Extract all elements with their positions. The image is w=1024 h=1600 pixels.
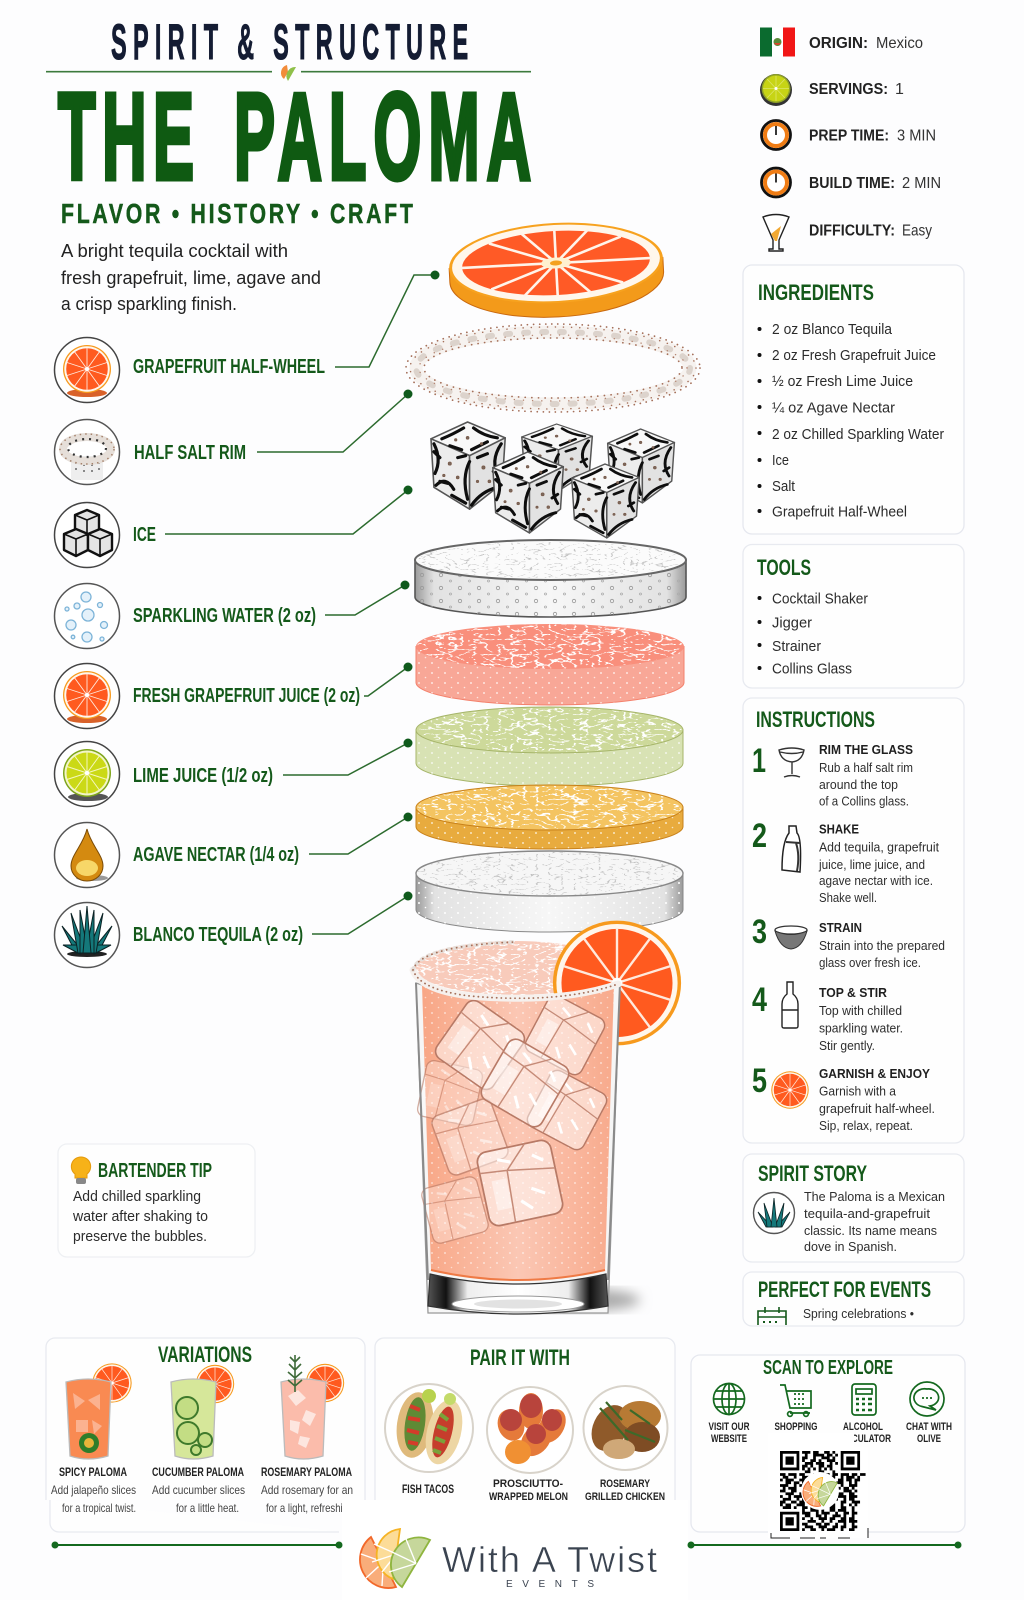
fact: prep time: 3 MIN	[897, 128, 936, 144]
step 2	[752, 817, 939, 905]
tool bullets	[758, 596, 762, 670]
label: sparkling water: SPARKLING WATER (2 oz)	[133, 605, 316, 627]
title: Spirit & Structure: SPIRIT & STRUCTURE	[111, 15, 468, 71]
step 1: of a Collins glass.	[819, 794, 909, 808]
heading: bartender tip: BARTENDER TIP	[98, 1160, 212, 1182]
step 1: 1	[752, 742, 766, 780]
ingredient list with leaders	[54, 270, 440, 968]
heading: pair it with: PAIR IT WITH	[470, 1345, 570, 1370]
pairing: prosciutto-wrapped melon	[487, 1387, 573, 1503]
layer: ice cubes	[431, 422, 674, 538]
tools list: Collins Glass	[772, 660, 852, 678]
pairing: rosemary grilled chicken: GRILLED CHICKEN	[585, 1491, 665, 1503]
text: spirit story: The Paloma is a Mexican	[804, 1189, 945, 1204]
fact: difficulty: Easy	[902, 222, 932, 240]
step 5: 5	[752, 1062, 767, 1100]
pairing: prosciutto-wrapped melon: WRAPPED MELON	[489, 1491, 568, 1503]
icon: build clock	[762, 168, 790, 197]
step 3: 3	[752, 913, 767, 951]
pairing: rosemary grilled chicken: ROSEMARY	[600, 1478, 651, 1490]
fact: difficulty: DIFFICULTY:	[809, 222, 895, 240]
ingredient list: ¼ oz Agave Nectar	[772, 400, 895, 416]
variation: spicy paloma: for a tropical twist.	[62, 1501, 136, 1515]
step 5: GARNISH & ENJOY	[819, 1066, 930, 1081]
step 5	[752, 1062, 935, 1133]
leader: ice	[165, 486, 412, 534]
heading: instructions: INSTRUCTIONS	[756, 707, 875, 732]
layer: grapefruit slice	[447, 217, 666, 323]
intro text	[61, 241, 321, 314]
label: half salt rim: HALF SALT RIM	[134, 442, 246, 464]
pairing: fish tacos	[385, 1384, 473, 1496]
variation: rosemary paloma	[261, 1355, 353, 1515]
ingredient list: 2 oz Chilled Sparkling Water	[772, 426, 944, 443]
step 3: Strain into the prepared	[819, 938, 945, 953]
step 4: 4	[752, 981, 767, 1019]
main title: The Paloma: PALOMA	[234, 68, 531, 206]
step 2: Shake well.	[819, 890, 877, 905]
bottom rule right	[688, 1542, 962, 1548]
intro text: A bright tequila cocktail with	[61, 241, 288, 261]
icon: ice	[54, 502, 120, 568]
text: bartender tip: Add chilled sparkling	[73, 1188, 201, 1205]
text: bartender tip: preserve the bubbles.	[73, 1228, 207, 1245]
title divider with logo	[46, 65, 531, 81]
text: bartender tip	[72, 1188, 208, 1245]
text: spirit story: tequila-and-grapefruit	[804, 1206, 930, 1221]
variation: cucumber paloma: Add cucumber slices	[152, 1483, 245, 1497]
text: spirit story: classic. Its name means	[804, 1223, 937, 1238]
heading: scan to explore: SCAN TO EXPLORE	[763, 1357, 893, 1379]
icon: sparkling water	[54, 584, 120, 648]
step 3	[752, 913, 945, 970]
panel: ingredients	[743, 265, 964, 534]
step 4: Stir gently.	[819, 1038, 875, 1053]
icon: chat	[910, 1382, 944, 1416]
recipe facts	[760, 28, 941, 251]
ingredient list: ½ oz Fresh Lime Juice	[772, 373, 913, 390]
fact: origin: Mexico	[876, 35, 923, 52]
scan labels: SHOPPING	[774, 1421, 818, 1433]
icon: calendar	[758, 1307, 786, 1325]
icon: lime juice	[54, 742, 120, 806]
step 2: 2	[752, 817, 767, 855]
layer: salt rim	[406, 324, 700, 412]
icon: agave nectar drop	[54, 822, 120, 888]
exploded cocktail stack	[406, 217, 700, 1314]
tools list	[772, 590, 868, 678]
pairing: prosciutto-wrapped melon: PROSCIUTTO-	[493, 1478, 563, 1490]
variation: spicy paloma: SPICY PALOMA	[59, 1465, 127, 1479]
icon: blanco tequila agave	[54, 902, 120, 968]
main title: The Paloma: THE	[58, 68, 194, 206]
step 5: Sip, relax, repeat.	[819, 1118, 913, 1133]
ingredient bullets	[758, 327, 762, 513]
variation: rosemary paloma: for a light, refreshin	[266, 1501, 348, 1515]
leader: half salt rim	[257, 390, 412, 452]
tools list: Cocktail Shaker	[772, 590, 868, 608]
scan labels: CHAT WITH	[906, 1421, 952, 1433]
step 4: Top with chilled	[819, 1003, 902, 1018]
finished cocktail glass	[413, 921, 681, 1314]
icon: half salt rim	[54, 420, 120, 484]
text: spirit story	[804, 1189, 945, 1254]
leader: fresh grapefruit juice	[364, 662, 412, 696]
variation: cucumber paloma: for a little heat.	[176, 1501, 239, 1515]
scan labels: ALCOHOL	[843, 1421, 883, 1433]
icon: globe	[714, 1384, 744, 1414]
fact: build time: 2 MIN	[902, 175, 941, 192]
heading: perfect for events: PERFECT FOR EVENTS	[758, 1277, 931, 1302]
panel: perfect for events	[743, 1272, 964, 1326]
text: spirit story: dove in Spanish.	[804, 1239, 897, 1254]
heading: tools: TOOLS	[757, 555, 811, 580]
icon: Mexican flag	[760, 28, 795, 56]
step 2: Add tequila, grapefruit	[819, 840, 939, 854]
fact: origin: ORIGIN:	[809, 35, 868, 52]
heading: variations: VARIATIONS	[158, 1342, 252, 1367]
step 1: Rub a half salt rim	[819, 760, 913, 775]
variation: cucumber paloma	[152, 1365, 245, 1515]
layer: agave nectar disk	[416, 785, 683, 849]
fact: prep time: PREP TIME:	[809, 128, 889, 144]
step 4	[752, 981, 903, 1053]
ingredient list: Grapefruit Half-Wheel	[772, 504, 907, 520]
layer: blanco tequila disk	[416, 851, 683, 932]
panel: instructions	[743, 698, 964, 1143]
step 2: SHAKE	[819, 822, 859, 836]
heading: spirit story: SPIRIT STORY	[758, 1161, 867, 1186]
leader: lime juice	[283, 738, 412, 775]
variation: rosemary paloma: ROSEMARY PALOMA	[261, 1465, 352, 1479]
main title: The Paloma	[58, 68, 531, 206]
step 4: TOP & STIR	[819, 985, 888, 1000]
step 2: juice, lime juice, and	[818, 857, 925, 872]
tools list: Jigger	[772, 614, 812, 632]
tagline: EVENTS	[506, 1579, 594, 1590]
ingredient list: 2 oz Blanco Tequila	[772, 321, 893, 338]
white mask behind logo	[342, 1500, 688, 1600]
panel: bartender tip	[58, 1144, 255, 1257]
variation: spicy paloma	[51, 1363, 136, 1515]
text: events: Spring celebrations •	[803, 1306, 914, 1321]
panel: spirit story	[743, 1154, 964, 1262]
leader: sparkling water	[325, 580, 410, 615]
icon: agave	[754, 1192, 794, 1234]
variation: rosemary paloma: Add rosemary for an	[261, 1483, 353, 1497]
icon: fresh grapefruit juice	[54, 664, 120, 728]
fact: servings: 1	[895, 81, 904, 98]
pairing: rosemary grilled chicken	[584, 1386, 668, 1503]
scan labels: OLIVE	[917, 1433, 941, 1445]
variation: cucumber paloma: CUCUMBER PALOMA	[152, 1465, 244, 1479]
logo: With A Twist Events	[360, 1529, 657, 1590]
step 1: RIM THE GLASS	[819, 742, 913, 757]
ingredient list: Ice	[772, 452, 789, 469]
scan labels	[708, 1421, 952, 1445]
icon: calculator	[852, 1384, 876, 1415]
scan labels: CALCULATOR	[835, 1433, 891, 1445]
label: ice: ICE	[133, 524, 156, 546]
leader: blanco tequila	[312, 892, 412, 934]
step 1: around the top	[819, 777, 898, 792]
heading: ingredients: INGREDIENTS	[758, 280, 874, 305]
scan labels: VISIT OUR	[708, 1421, 750, 1433]
label: fresh grapefruit juice: FRESH GRAPEFRUIT JUICE (2 oz)	[133, 685, 360, 707]
wordmark: With A Twist	[442, 1539, 657, 1580]
intro text: a crisp sparkling finish.	[61, 294, 237, 314]
layer: fresh grapefruit juice disk	[416, 624, 684, 705]
leader: grapefruit half-wheel	[335, 270, 440, 367]
step 5: grapefruit half-wheel.	[819, 1101, 935, 1116]
intro text: fresh grapefruit, lime, agave and	[61, 268, 321, 288]
step 2: agave nectar with ice.	[819, 873, 933, 888]
icon: lightbulb	[71, 1157, 91, 1184]
panel: pair it with	[375, 1338, 675, 1503]
icon: lime	[760, 74, 792, 106]
icon: grapefruit half-wheel	[54, 338, 120, 402]
pairing: fish tacos: FISH TACOS	[402, 1482, 454, 1496]
bottom rule left	[52, 1542, 342, 1548]
text: bartender tip: water after shaking to	[72, 1208, 208, 1225]
variation: spicy paloma: Add jalapeño slices	[51, 1483, 136, 1497]
layer: sparkling water disk	[415, 540, 686, 617]
tools list: Strainer	[772, 638, 821, 655]
step 5: Garnish with a	[819, 1084, 897, 1098]
ingredient list: Salt	[772, 478, 796, 495]
leader: agave nectar	[309, 812, 412, 854]
step 3: glass over fresh ice.	[819, 955, 921, 970]
step 1	[752, 742, 913, 808]
step 4: sparkling water.	[819, 1020, 903, 1036]
ingredient list: 2 oz Fresh Grapefruit Juice	[772, 347, 936, 364]
label: lime juice: LIME JUICE (1/2 oz)	[133, 765, 273, 787]
panel: scan to explore	[691, 1355, 965, 1532]
icon: prep clock	[762, 120, 790, 150]
icon: citrus fan	[360, 1529, 430, 1588]
fact: build time: BUILD TIME:	[809, 175, 895, 192]
fact: origin	[809, 35, 923, 52]
icon: shopping cart	[780, 1385, 811, 1416]
label: blanco tequila: BLANCO TEQUILA (2 oz)	[133, 924, 303, 946]
panel: variations	[46, 1338, 365, 1532]
step 3: STRAIN	[819, 920, 862, 935]
layer: lime juice disk	[416, 707, 683, 786]
label: agave nectar: AGAVE NECTAR (1/4 oz)	[133, 844, 299, 866]
label: grapefruit half-wheel: GRAPEFRUIT HALF-WHEEL	[133, 356, 325, 378]
panel: tools	[743, 544, 964, 688]
QR code	[768, 1432, 868, 1538]
ingredient list	[772, 321, 944, 520]
icon: difficulty glass	[763, 214, 789, 251]
fact: servings: SERVINGS:	[809, 81, 888, 98]
scan labels: WEBSITE	[711, 1433, 747, 1445]
subtitle: FLAVOR • HISTORY • CRAFT	[61, 198, 413, 230]
